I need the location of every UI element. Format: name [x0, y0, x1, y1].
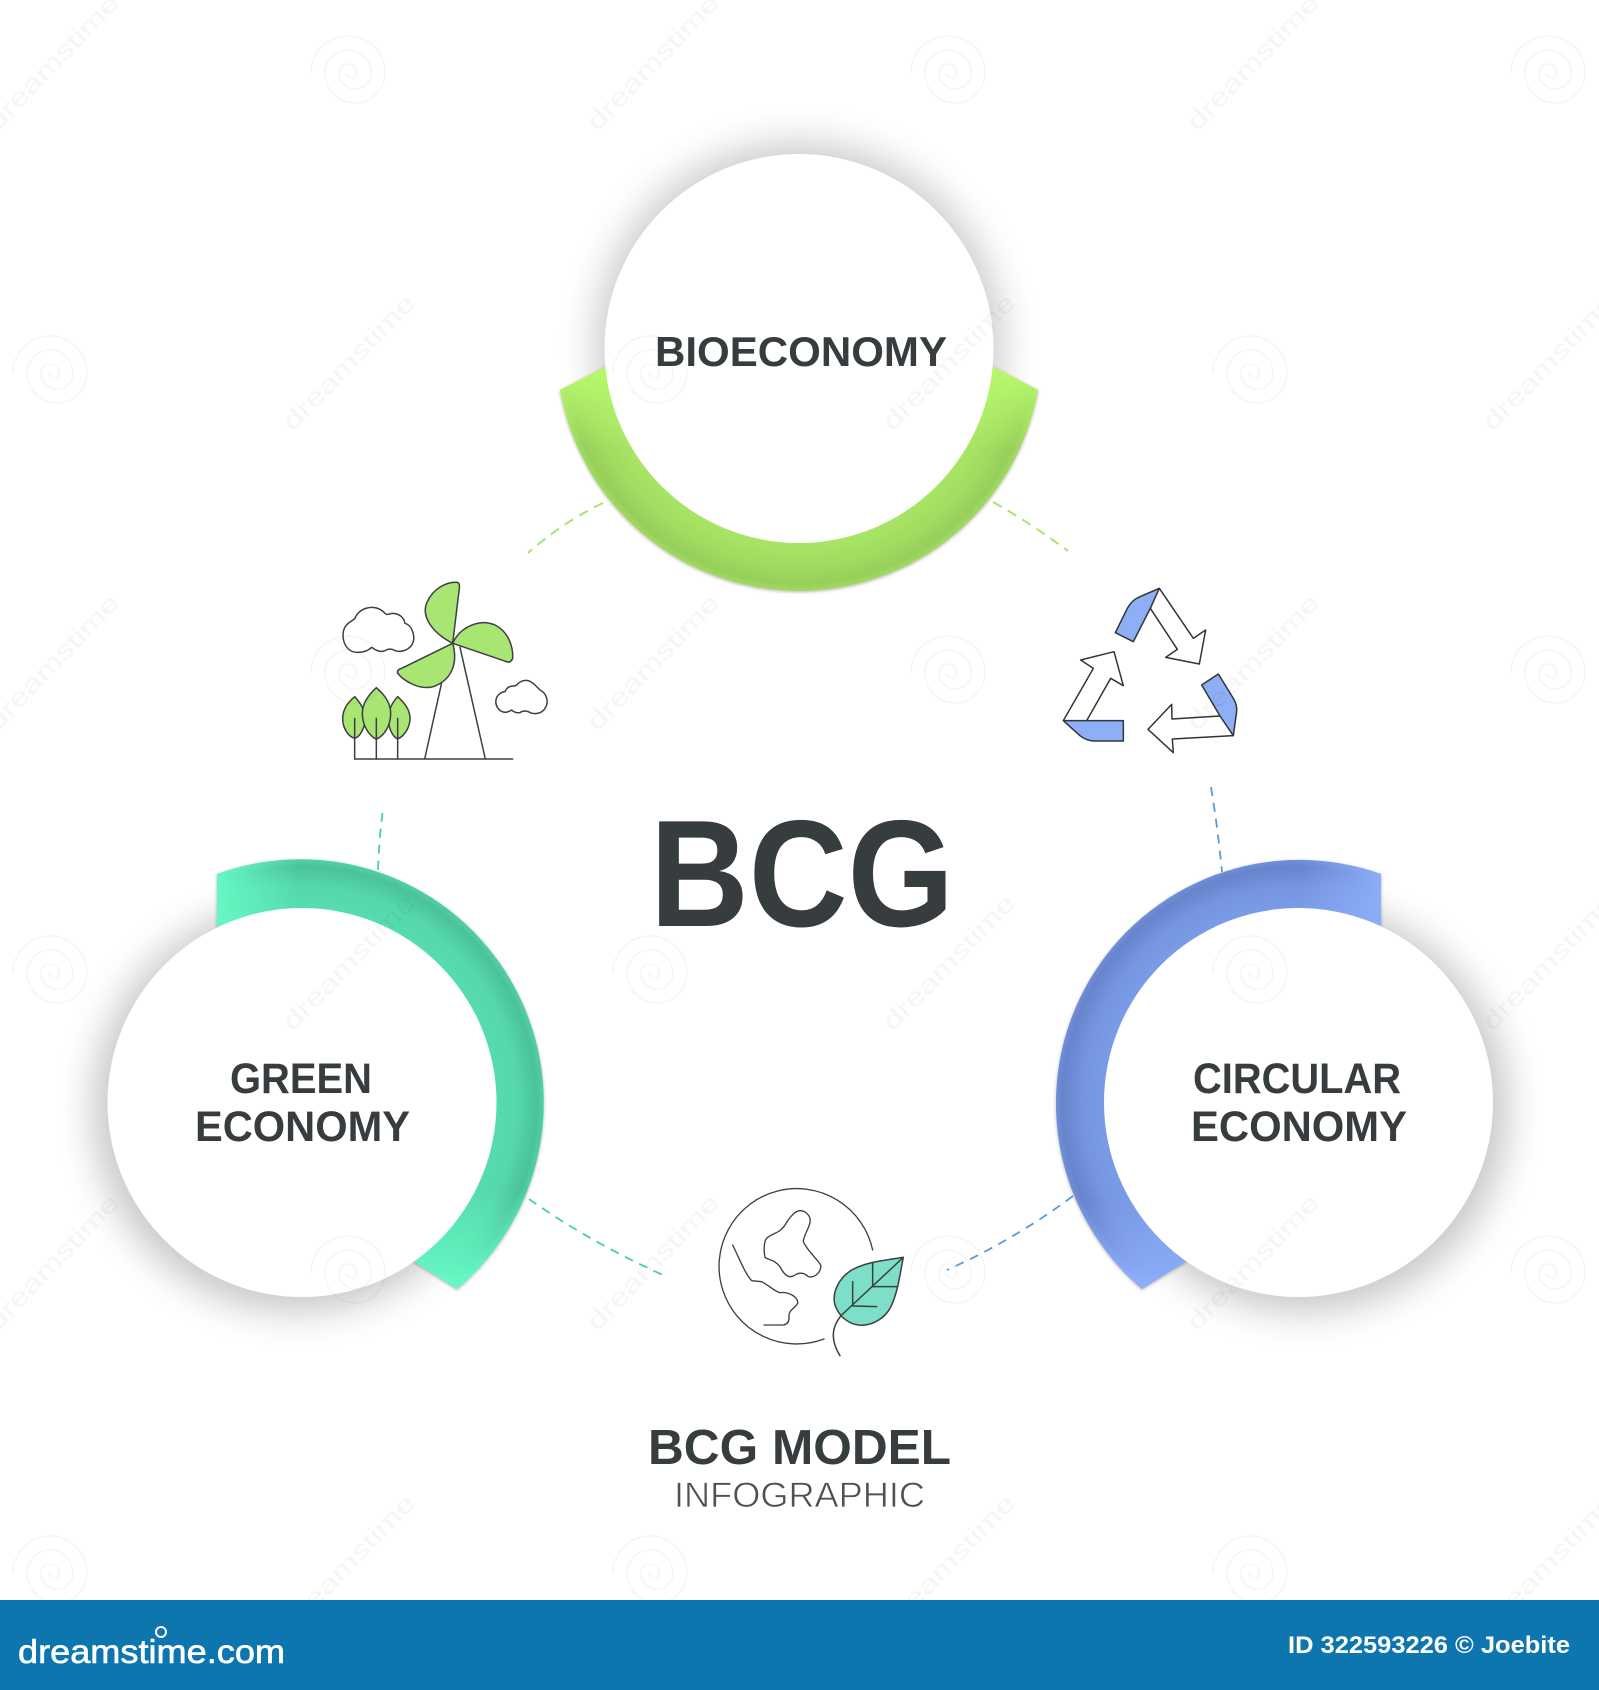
green ring segment — [560, 300, 1038, 591]
label: green economy: GREEN — [230, 1055, 372, 1103]
subheading: infographic: INFOGRAPHIC — [674, 1476, 925, 1515]
title: BCG: BCG — [650, 789, 954, 959]
watermark pattern: dreamstime — [581, 1189, 725, 1336]
watermark pattern: dreamstime — [1477, 289, 1599, 436]
panel: bioeconomy circle — [560, 142, 1038, 591]
footer logo: dreamstime.com: dreamstime.com — [18, 1633, 285, 1670]
watermark pattern: dreamstime — [277, 289, 421, 436]
watermark pattern: dreamstime — [1181, 589, 1325, 736]
label: circular economy: CIRCULAR — [1193, 1055, 1401, 1103]
label: circular economy — [1191, 1055, 1407, 1151]
watermark pattern: dreamstime — [877, 1489, 1021, 1636]
label: green economy: ECONOMY — [195, 1103, 410, 1151]
watermark pattern: dreamstime — [877, 889, 1021, 1036]
watermark pattern: dreamstime — [1181, 0, 1325, 136]
panel: green economy circle — [93, 859, 544, 1312]
watermark pattern: dreamstime — [877, 289, 1021, 436]
label: circular economy: ECONOMY — [1191, 1103, 1407, 1151]
icon: wind turbine with trees and clouds — [343, 582, 547, 759]
watermark pattern: dreamstime — [1181, 1189, 1325, 1336]
watermark pattern: dreamstime — [581, 0, 725, 136]
teal ring segment — [217, 859, 544, 1289]
watermark pattern: dreamstime — [1477, 1489, 1599, 1636]
footer credit: image id: ID 322593226 © Joebite — [1288, 1632, 1570, 1659]
label: green economy — [195, 1055, 410, 1151]
blue ring segment — [1056, 860, 1381, 1289]
watermark pattern: dreamstime — [1477, 889, 1599, 1036]
watermark pattern: dreamstime — [277, 889, 421, 1036]
watermark pattern: dreamstime — [277, 1489, 421, 1636]
icon: recycling arrows — [1063, 588, 1237, 753]
connector: green dashed lines — [528, 502, 1068, 553]
footer bar — [0, 1600, 1599, 1690]
connector: teal dashed lines — [378, 813, 663, 1275]
watermark pattern: dreamstime — [581, 589, 725, 736]
panel: circular economy circle — [1056, 860, 1508, 1312]
connector: blue dashed lines — [947, 787, 1222, 1270]
label: bioeconomy: BIOECONOMY — [655, 328, 947, 375]
icon: globe with leaf — [719, 1189, 903, 1356]
heading: BCG model: BCG MODEL — [648, 1421, 951, 1475]
